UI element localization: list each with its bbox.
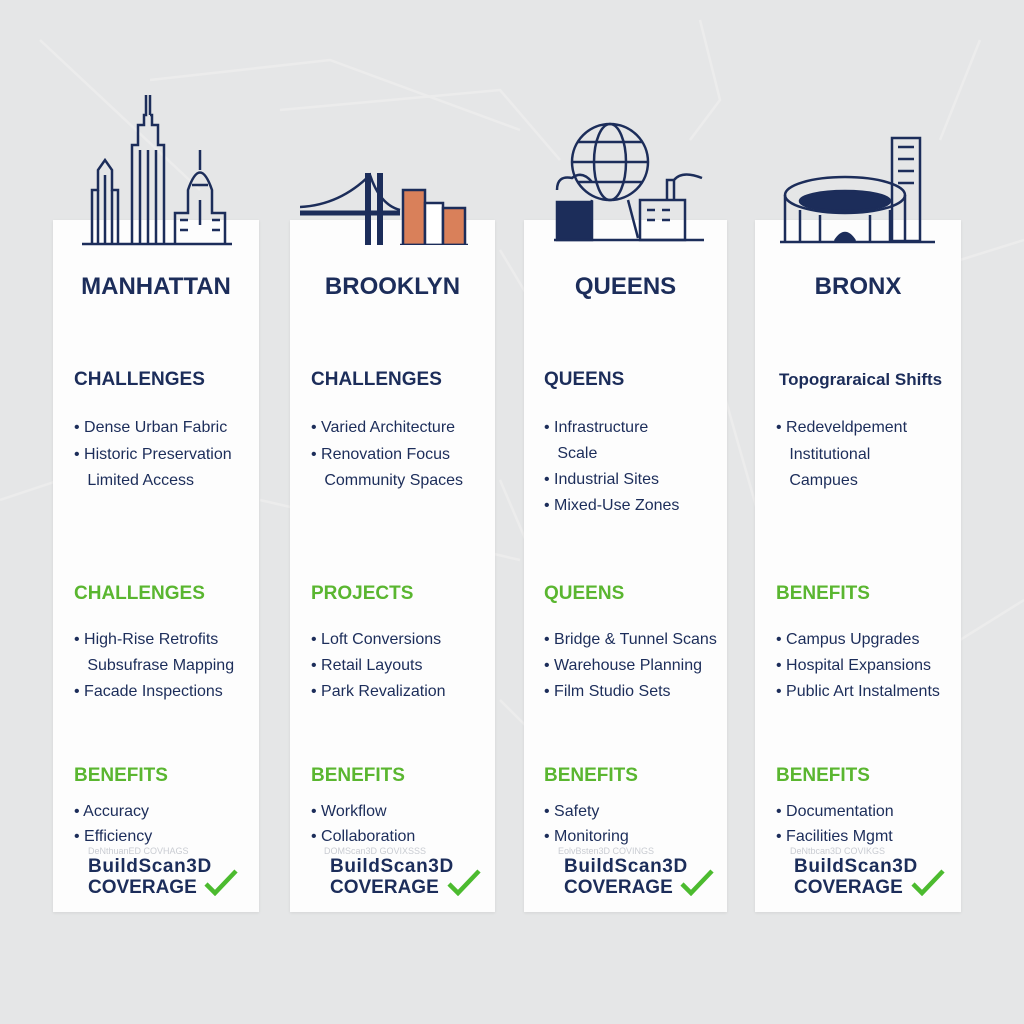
heading: CHALLENGES: [311, 369, 442, 390]
title: BRONX: [815, 273, 901, 300]
coverage: [330, 856, 454, 898]
benefits heading: BENEFITS: [311, 765, 405, 786]
bullets: • Retail Layouts: [311, 657, 422, 674]
bullets: • Industrial Sites: [544, 471, 659, 488]
bullets: Limited Access: [87, 472, 194, 489]
benefits: [544, 803, 629, 845]
bullets: • Mixed-Use Zones: [544, 497, 679, 514]
benefits: [776, 803, 894, 845]
benefits: • Efficiency: [74, 828, 152, 845]
coverage: BuildScan3D: [564, 856, 688, 877]
title: BROOKLYN: [325, 273, 460, 300]
bullets: • Film Studio Sets: [544, 683, 671, 700]
icon: Bronx stadium: [780, 136, 935, 244]
bullets: • Park Revalization: [311, 683, 446, 700]
coverage: COVERAGE: [564, 877, 673, 898]
faint text: EolvBsten3D COVINGS: [558, 846, 654, 856]
heading: Topograraical Shifts: [779, 370, 942, 389]
benefits: [311, 803, 415, 845]
bullets: Subsufrase Mapping: [87, 657, 234, 674]
bullets: Scale: [557, 445, 597, 462]
heading green: QUEENS: [544, 583, 624, 604]
bullets: • Renovation Focus: [311, 446, 450, 462]
bullets: [544, 419, 679, 514]
title: MANHATTAN: [81, 273, 231, 300]
bullets: • Public Art Instalments: [776, 683, 940, 700]
faint text: DeNthuanED COVHAGS: [88, 846, 189, 856]
benefits heading: BENEFITS: [776, 765, 870, 786]
column: Manhattan: [74, 273, 238, 898]
faint text: DOMScan3D GOVIXSSS: [324, 846, 426, 856]
heading: CHALLENGES: [74, 369, 205, 390]
bullets: Institutional: [789, 446, 870, 462]
column: Queens: [544, 273, 717, 898]
faint text: DeNtbcan3D COVIKGS: [790, 846, 885, 856]
bullets: Community Spaces: [324, 472, 463, 489]
bullets: Campues: [789, 472, 858, 489]
benefits: • Safety: [544, 803, 599, 820]
bullets: • Facade Inspections: [74, 683, 223, 700]
card: Queens: [524, 220, 727, 912]
bullets: • Redeveldpement: [776, 419, 907, 436]
benefits: • Facilities Mgmt: [776, 828, 893, 845]
coverage: [88, 856, 212, 898]
bullets: • Campus Upgrades: [776, 631, 919, 648]
coverage: COVERAGE: [88, 877, 197, 898]
benefits heading: BENEFITS: [74, 765, 168, 786]
bullets: • High-Rise Retrofits: [74, 631, 218, 648]
column: Bronx: [776, 273, 944, 898]
coverage: COVERAGE: [794, 877, 903, 898]
bullets: [776, 419, 907, 489]
coverage: COVERAGE: [330, 877, 439, 898]
icon: check: [204, 870, 238, 896]
bullets: [776, 631, 940, 700]
coverage: BuildScan3D: [88, 856, 212, 877]
benefits: • Collaboration: [311, 828, 415, 845]
icon: Brooklyn bridge: [300, 172, 468, 245]
bullets: • Varied Architecture: [311, 419, 455, 436]
bullets: • Warehouse Planning: [544, 657, 702, 674]
bullets: • Infrastructure: [544, 419, 648, 436]
benefits: • Workflow: [311, 803, 387, 820]
icon: check: [912, 870, 944, 896]
bullets: [311, 419, 463, 489]
icon: check: [448, 870, 480, 896]
card: Bronx: [755, 220, 961, 912]
heading green: PROJECTS: [311, 583, 413, 604]
heading: QUEENS: [544, 369, 624, 390]
bullets: [311, 631, 446, 700]
icon: check: [680, 870, 714, 896]
card: Manhattan: [53, 220, 259, 912]
icon: Manhattan skyline: [82, 95, 232, 246]
bullets: • Dense Urban Fabric: [74, 419, 227, 436]
card: Brooklyn: [290, 220, 495, 912]
bullets: • Historic Preservation: [74, 446, 232, 462]
bullets: • Hospital Expansions: [776, 657, 931, 674]
benefits: • Accuracy: [74, 803, 149, 820]
coverage: BuildScan3D: [330, 856, 454, 877]
coverage: [794, 856, 918, 898]
heading green: CHALLENGES: [74, 583, 205, 604]
column: Brooklyn: [311, 273, 480, 898]
bullets: • Bridge & Tunnel Scans: [544, 631, 717, 648]
bullets: • Loft Conversions: [311, 631, 441, 648]
bullets: [74, 631, 234, 700]
benefits: [74, 803, 152, 845]
coverage: [564, 856, 688, 898]
benefits: • Monitoring: [544, 828, 629, 845]
heading green: BENEFITS: [776, 583, 870, 604]
title: QUEENS: [575, 273, 676, 300]
benefits: • Documentation: [776, 803, 894, 820]
icon: Queens unisphere: [554, 122, 704, 242]
benefits heading: BENEFITS: [544, 765, 638, 786]
bullets: [544, 631, 717, 700]
coverage: BuildScan3D: [794, 856, 918, 877]
bullets: [74, 419, 232, 489]
